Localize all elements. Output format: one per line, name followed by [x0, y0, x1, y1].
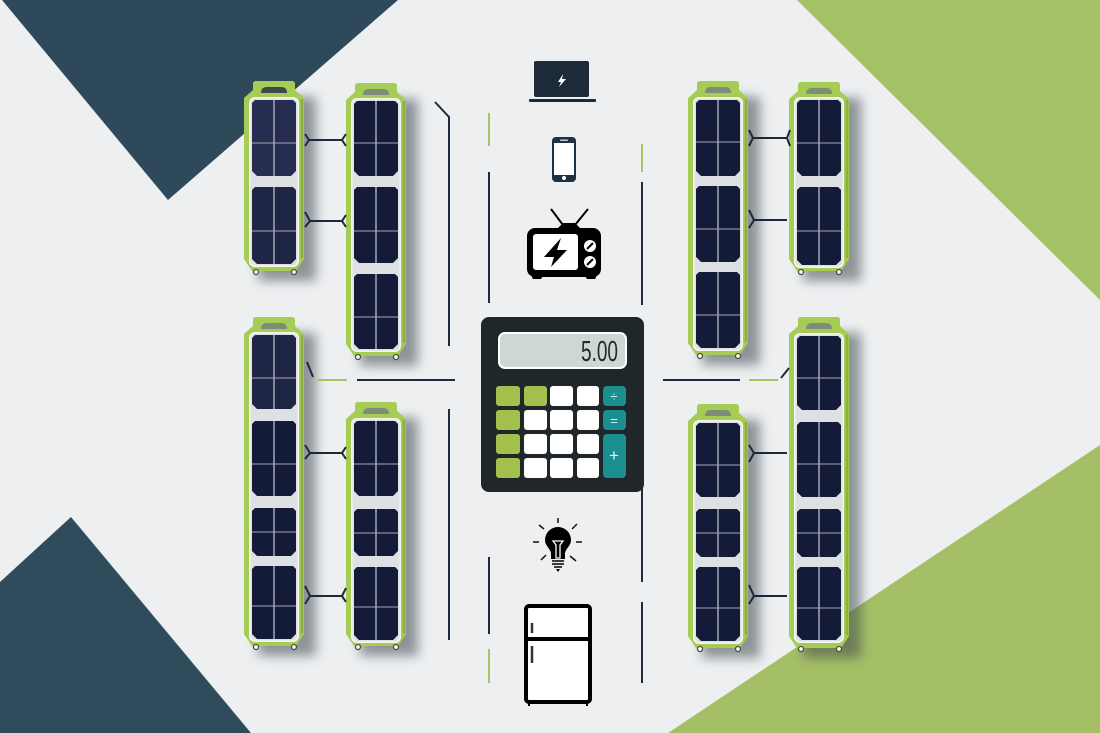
icon: television [527, 209, 601, 279]
solar panel unit: top left, three modules [346, 83, 418, 366]
icon: laptop [529, 61, 596, 102]
calculator number keys [524, 386, 599, 478]
green triangle top right [797, 0, 1100, 300]
solar panel unit: top right, three modules [688, 81, 760, 365]
dark triangle top left [2, 0, 398, 200]
calculator [481, 317, 644, 492]
icon: light bulb [533, 518, 582, 572]
icon: refrigerator [526, 606, 590, 706]
solar panel unit: bottom left, three modules [346, 402, 418, 656]
circuit lines left of calculator [307, 102, 489, 683]
solar panel unit: top left, two modules [244, 81, 316, 281]
calculator operator keys: ÷ [610, 389, 618, 404]
solar panel unit: bottom right, three modules [688, 404, 760, 658]
calculator operator keys [603, 386, 626, 478]
solar panel unit: bottom right, four modules [789, 317, 861, 658]
calculator display: 5.00 [581, 336, 618, 368]
green triangle bottom right [668, 445, 1100, 733]
calculator operator keys: = [610, 413, 618, 428]
circuit lines right of calculator [642, 144, 789, 683]
solar panel unit: bottom left, four modules [244, 317, 316, 656]
dark polygon bottom left [0, 517, 251, 733]
calculator display [499, 333, 626, 368]
calculator green keys [496, 386, 547, 478]
calculator operator keys: + [609, 446, 619, 465]
icon: smartphone [552, 137, 576, 182]
solar panel unit: top right, two modules [789, 82, 861, 281]
panel connectors [305, 130, 790, 604]
